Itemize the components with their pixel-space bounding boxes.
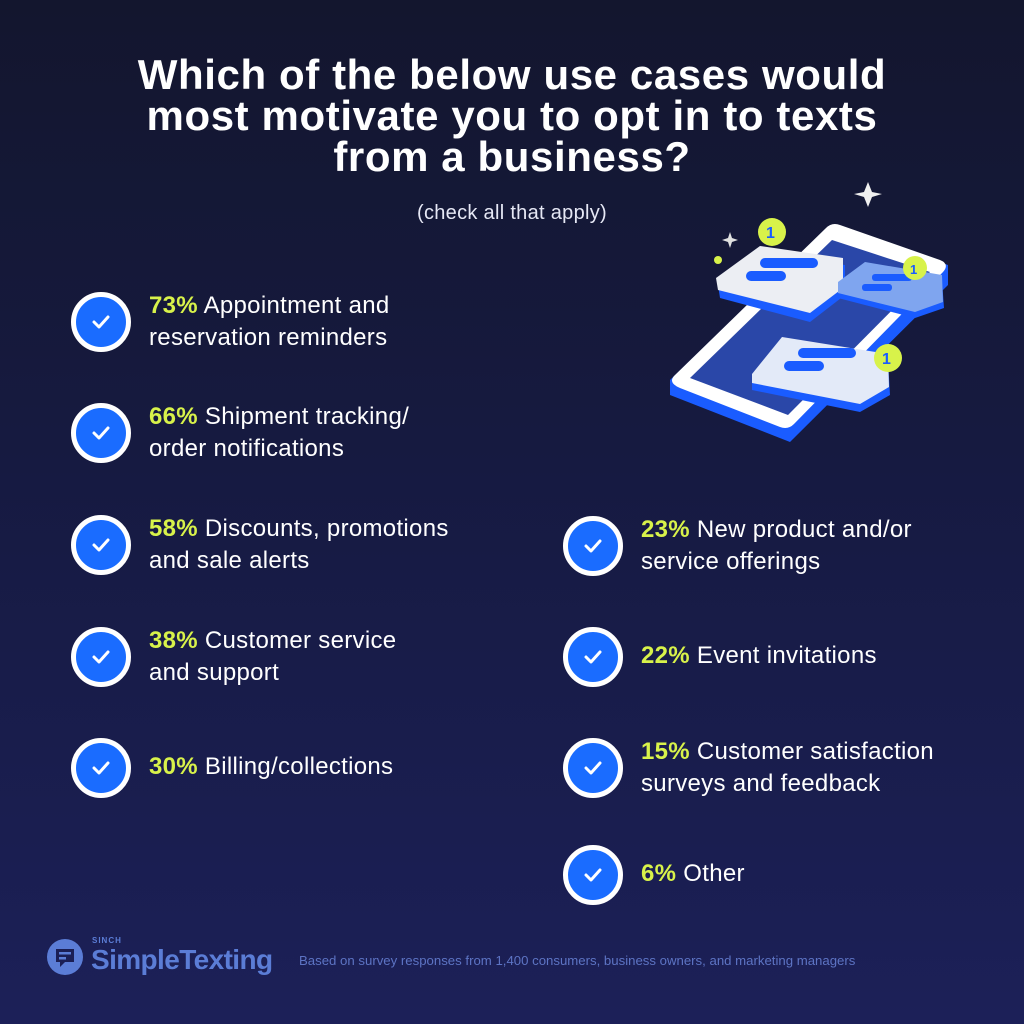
message 3: 1 <box>882 351 891 368</box>
subtitle: (check all that apply) <box>417 202 607 224</box>
item: 30%: 30% Billing/collections <box>149 753 393 780</box>
item: 23%: 23% New product and/or <box>641 516 912 543</box>
message 3 <box>752 337 902 412</box>
item: 66% <box>71 403 409 463</box>
item: 38% <box>71 627 396 687</box>
item: 58%: 58% Discounts, promotions <box>149 515 449 542</box>
footnote: Based on survey responses from 1,400 consumers, business owners, and marketing managers <box>299 953 855 968</box>
message 1: 1 <box>766 225 775 242</box>
logo: SINCH <box>92 936 122 945</box>
item: 73% <box>71 292 390 352</box>
item: 23% <box>563 516 912 576</box>
item: 15%: surveys and feedback <box>641 770 880 797</box>
item: 58% <box>71 515 449 575</box>
message 2: 1 <box>910 262 917 277</box>
item: 38%: 38% Customer service <box>149 627 396 654</box>
title: most motivate you to opt in to texts <box>147 92 877 139</box>
item: 22%: 22% Event invitations <box>641 642 877 669</box>
logo: SimpleTexting <box>91 944 272 975</box>
item: 6%: 6% Other <box>641 860 745 887</box>
item: 30% <box>71 738 393 798</box>
item: 73%: reservation reminders <box>149 324 387 351</box>
item: 23%: service offerings <box>641 548 820 575</box>
item: 38%: and support <box>149 659 279 686</box>
item: 73%: 73% Appointment and <box>149 292 390 319</box>
illustration: phone with messages <box>670 182 948 442</box>
item: 66%: order notifications <box>149 435 344 462</box>
item: 66%: 66% Shipment tracking/ <box>149 403 409 430</box>
logo <box>47 936 272 975</box>
title <box>138 51 886 180</box>
item: 6% <box>563 845 745 905</box>
item: 15%: 15% Customer satisfaction <box>641 738 934 765</box>
item: 15% <box>563 738 934 798</box>
item: 22% <box>563 627 877 687</box>
message 2 <box>838 256 944 318</box>
message 1 <box>716 218 845 322</box>
title: from a business? <box>333 133 691 180</box>
title: Which of the below use cases would <box>138 51 886 98</box>
item: 58%: and sale alerts <box>149 547 310 574</box>
